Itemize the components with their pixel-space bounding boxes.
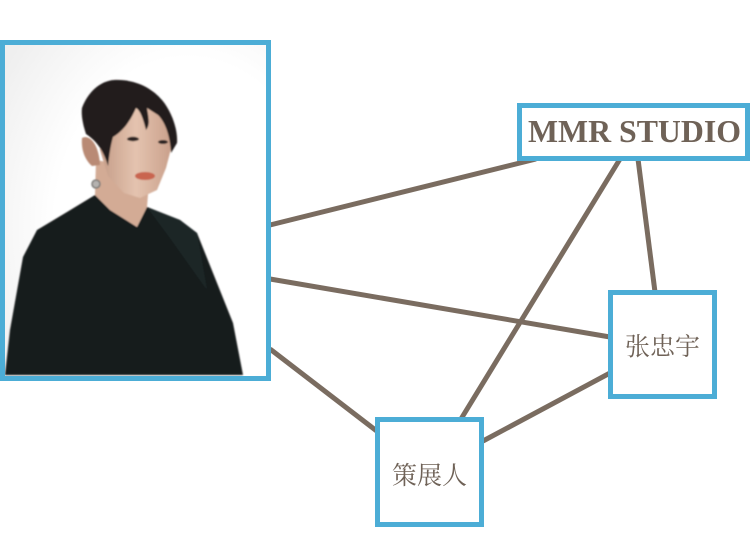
- portrait photo panel: [2, 42, 268, 378]
- icon: neck: [95, 160, 150, 227]
- icon: hair: [82, 80, 177, 166]
- icon: shirt: [5, 195, 243, 375]
- connecting lines: [270, 159, 655, 441]
- box: MMR STUDIO: MMR STUDIO: [528, 113, 741, 149]
- box: MMR STUDIO: [520, 106, 748, 158]
- box: 策展人: [378, 420, 482, 524]
- icon: ear: [82, 137, 100, 166]
- box: 张忠宇: 张忠宇: [625, 327, 700, 363]
- icon: face: [100, 98, 172, 198]
- icon: earring: [92, 180, 100, 188]
- portrait figure: [5, 80, 243, 375]
- box: 张忠宇: [610, 292, 714, 396]
- photo frame: [2, 42, 268, 378]
- icon: eyes and mouth: [127, 137, 168, 180]
- box: 策展人: 策展人: [392, 456, 467, 492]
